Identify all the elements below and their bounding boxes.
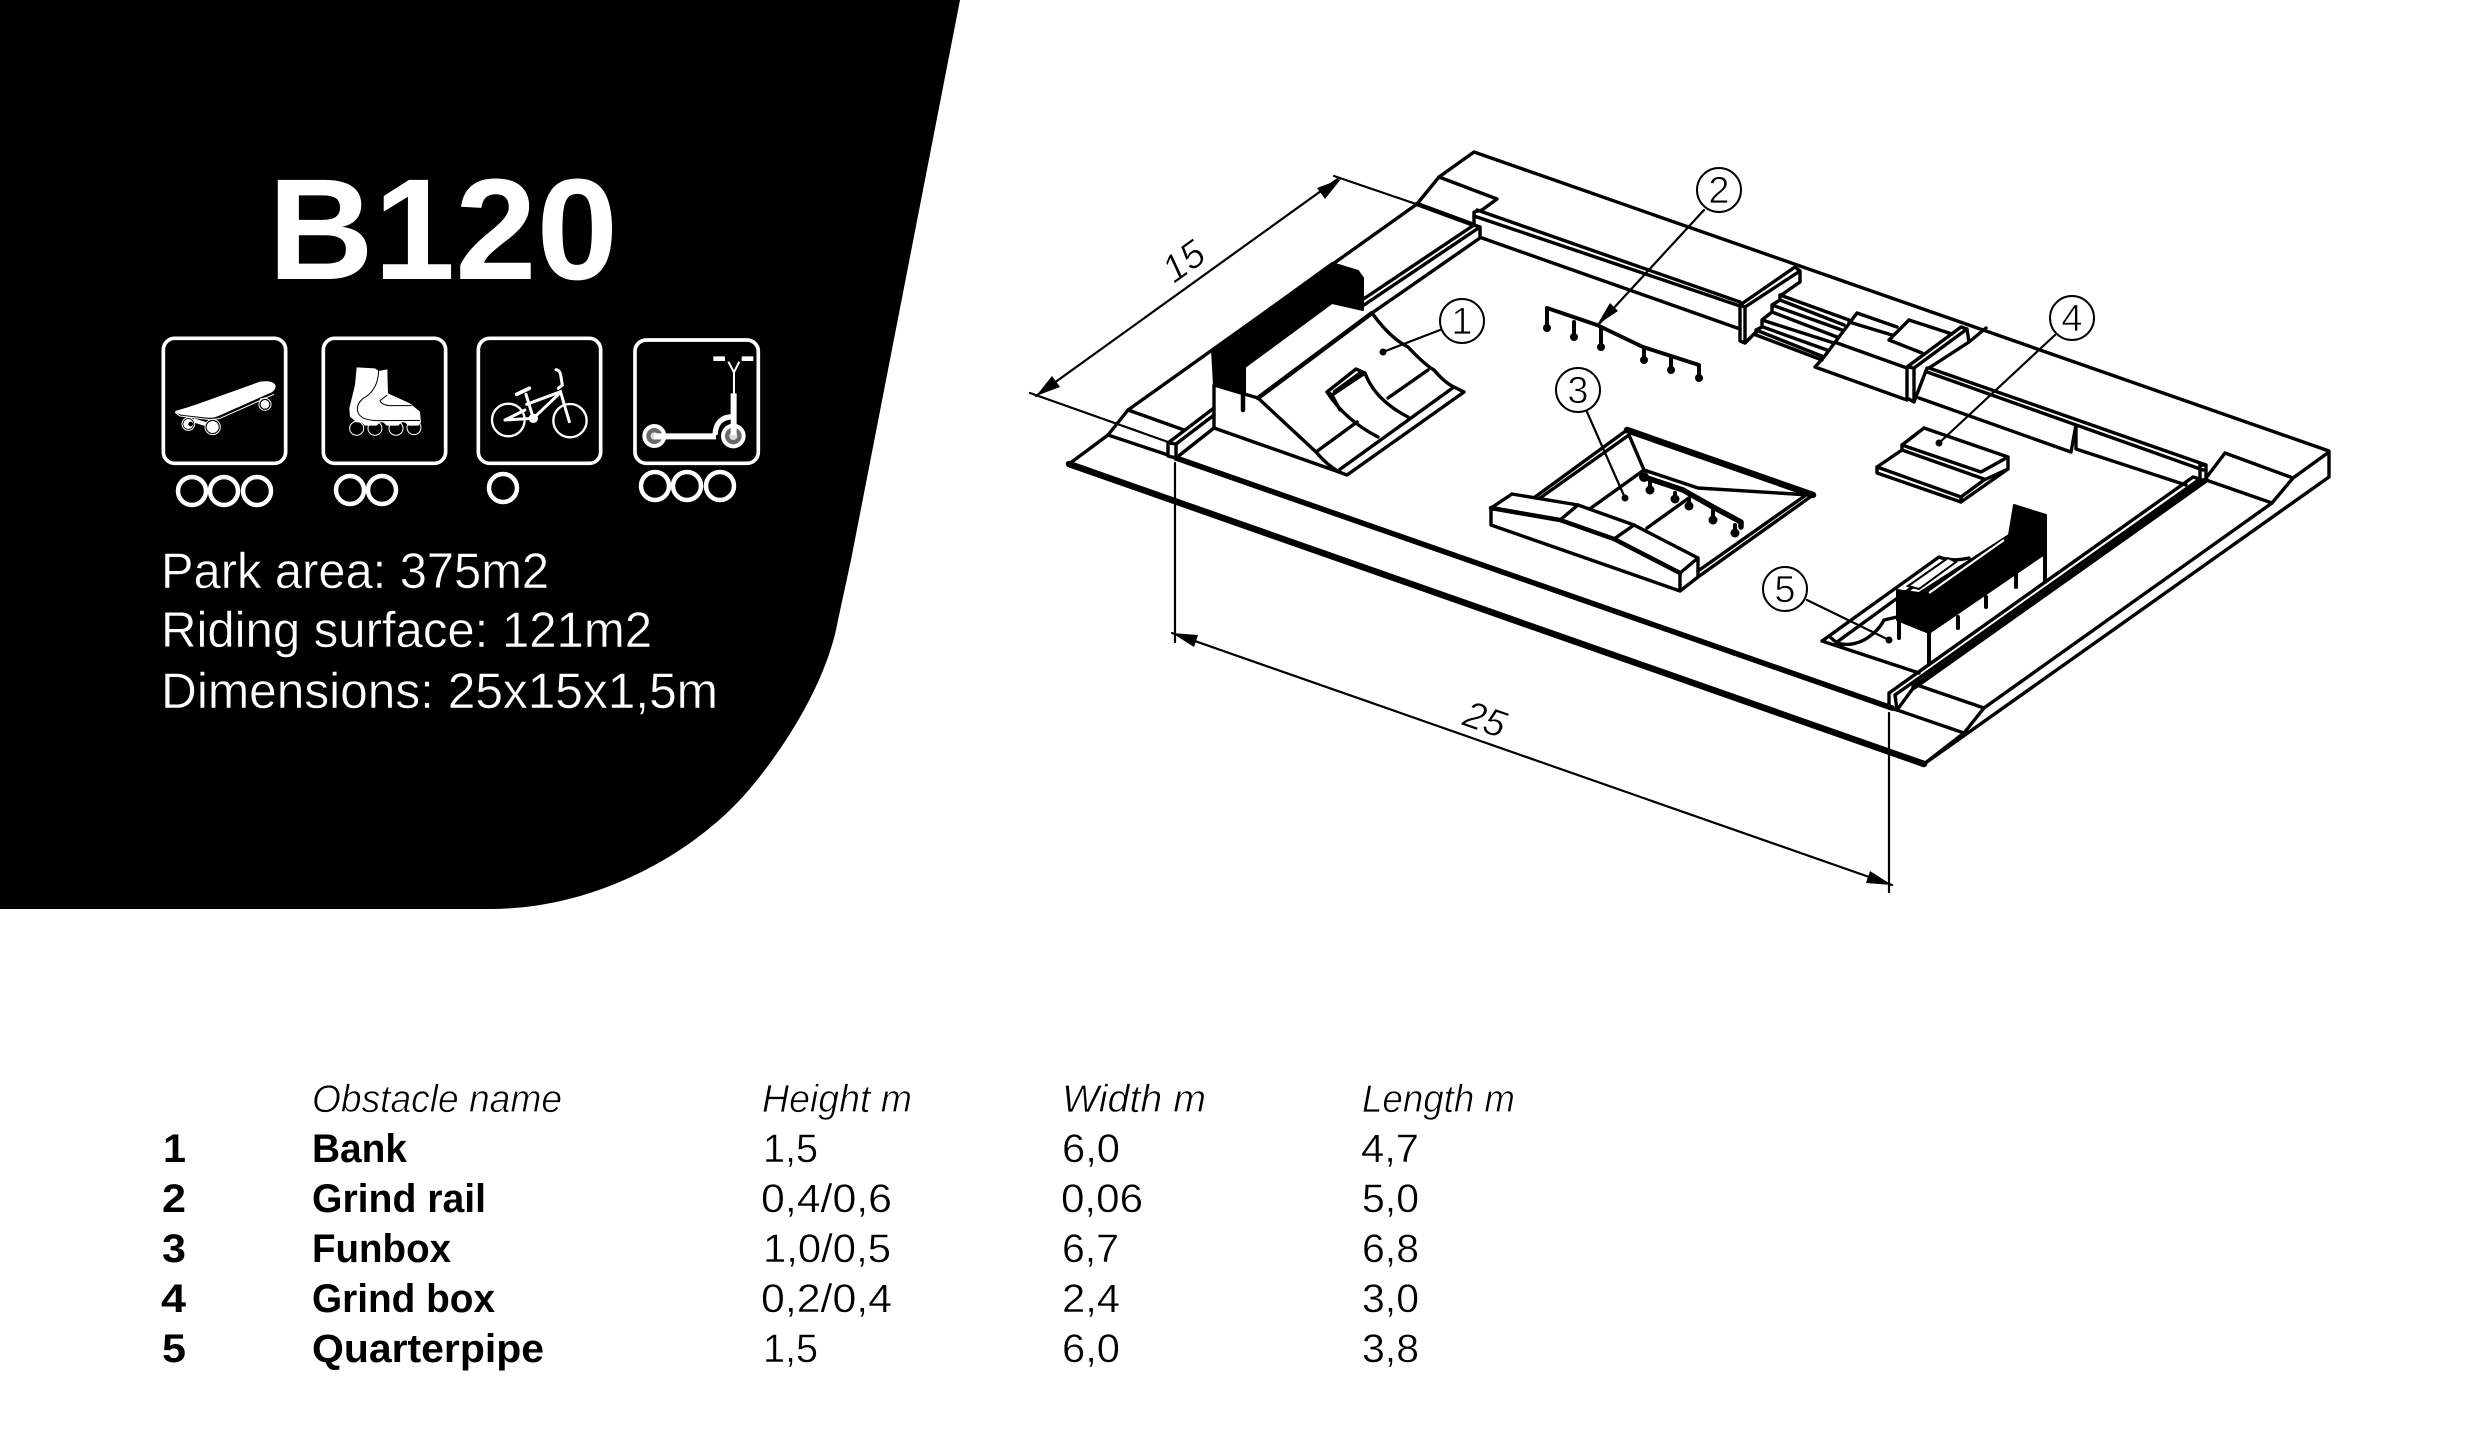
callout 1 <box>1380 299 1484 356</box>
icon: BMX bike with difficulty ring <box>478 338 601 502</box>
row 2: Grind rail <box>312 1177 486 1221</box>
table header: Length m <box>1362 1078 1515 1121</box>
row 4: 2,4 <box>1062 1277 1120 1321</box>
row 2: 0,4/0,6 <box>761 1177 892 1221</box>
row 2 <box>162 1177 1419 1221</box>
callout 1: 1 <box>1451 301 1473 343</box>
row 4: 4 <box>161 1277 187 1321</box>
row 5: 6,0 <box>1062 1327 1120 1371</box>
row 1: 4,7 <box>1361 1127 1419 1171</box>
row 5 <box>162 1327 1419 1371</box>
row 5: 5 <box>162 1327 186 1371</box>
callout 4 <box>1936 296 2094 446</box>
table header: Obstacle name <box>312 1078 562 1121</box>
obstacle 4: grind box <box>1877 428 2008 502</box>
row 3: 6,7 <box>1062 1227 1119 1271</box>
dimension: length 25 <box>1172 463 1892 892</box>
row 1 <box>163 1127 1419 1171</box>
platform outline <box>1069 152 2329 764</box>
icon: inline skate with difficulty rings <box>323 338 446 504</box>
park facts text <box>161 543 718 719</box>
table header <box>312 1078 1515 1121</box>
obstacle 5: quarterpipe <box>1822 505 2046 673</box>
callout 2 <box>1597 168 1741 325</box>
park facts text: Dimensions: 25x15x1,5m <box>161 663 718 719</box>
row 5: Quarterpipe <box>312 1327 544 1371</box>
table header: Width m <box>1062 1078 1206 1121</box>
dimension: width 15 <box>1030 176 1416 442</box>
dimension: length 25: 25 <box>1457 693 1512 747</box>
callout 5: 5 <box>1774 569 1796 611</box>
row 1: 1,5 <box>763 1127 818 1171</box>
obstacle 2: grind rail <box>1543 308 1703 382</box>
row 4: 3,0 <box>1362 1277 1419 1321</box>
row 1: 6,0 <box>1062 1127 1120 1171</box>
stairs <box>1756 295 1849 360</box>
row 1: Bank <box>312 1127 408 1171</box>
obstacle 1: bank <box>1212 263 1464 475</box>
callout 4: 4 <box>2061 298 2083 340</box>
black header panel <box>0 0 960 909</box>
row 2: 0,06 <box>1061 1177 1143 1221</box>
row 3: 1,0/0,5 <box>763 1227 891 1271</box>
row 3: 6,8 <box>1362 1227 1419 1271</box>
row 3 <box>162 1227 1419 1271</box>
row 2: 5,0 <box>1362 1177 1419 1221</box>
table header: Height m <box>762 1078 912 1121</box>
row 3: Funbox <box>312 1227 451 1271</box>
obstacle table <box>161 1078 1515 1371</box>
row 1: 1 <box>163 1127 186 1171</box>
callout 3 <box>1556 368 1628 502</box>
row 2: 2 <box>162 1177 186 1221</box>
row 4: Grind box <box>312 1277 495 1321</box>
row 4: 0,2/0,4 <box>761 1277 892 1321</box>
park facts text: Park area: 375m2 <box>161 543 549 599</box>
row 3: 3 <box>162 1227 186 1271</box>
row 5: 1,5 <box>763 1327 818 1371</box>
dimension: width 15: 15 <box>1155 232 1214 291</box>
icon: skateboard with difficulty rings <box>163 338 286 505</box>
callout 2: 2 <box>1708 170 1730 212</box>
park facts text: Riding surface: 121m2 <box>161 602 652 658</box>
callout 3: 3 <box>1567 370 1589 412</box>
row 5: 3,8 <box>1362 1327 1419 1371</box>
obstacle 3: funbox <box>1491 430 1813 591</box>
row 4 <box>161 1277 1419 1321</box>
title: B120 <box>268 149 618 310</box>
callout 5 <box>1763 567 1892 644</box>
icon: scooter with difficulty rings <box>635 340 758 500</box>
isometric skatepark drawing <box>1030 152 2329 892</box>
